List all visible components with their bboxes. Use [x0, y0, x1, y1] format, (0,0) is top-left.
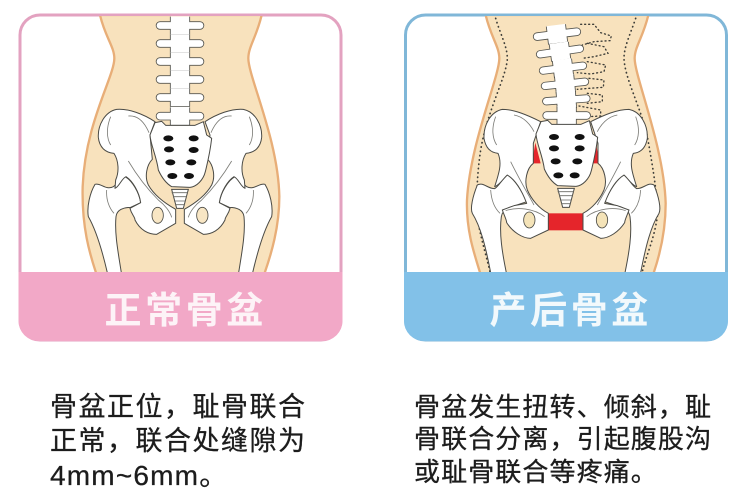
- red highlight: pubic symphysis gap: [547, 213, 585, 230]
- right hip and femur: [184, 109, 272, 273]
- panel: postpartum pelvis: [404, 15, 728, 341]
- red highlight: sacroiliac joint gaps: [532, 143, 599, 163]
- body silhouette: [467, 15, 666, 277]
- text block: normal pelvis description: 4mm~6mm。: [50, 460, 228, 491]
- text block: normal pelvis description: 正常，联合处缝隙为: [50, 426, 306, 456]
- text block: postpartum pelvis description: 骨盆发生扭转、倾斜，耻: [414, 392, 712, 422]
- text block: normal pelvis description: 骨盆正位，耻骨联合: [50, 392, 306, 422]
- text block: postpartum pelvis description: 骨联合分离，引起腹股沟: [414, 424, 712, 454]
- spine: [156, 16, 204, 126]
- text block: normal pelvis description: [50, 392, 306, 491]
- sacrum: [150, 121, 212, 208]
- panel frame: normal pelvis: [20, 15, 341, 340]
- spine, tilted: [532, 22, 591, 125]
- illustration: normal pelvis: [83, 15, 279, 277]
- heading: normal pelvis: 正常骨盆: [104, 290, 267, 331]
- panel: normal pelvis: [18, 15, 342, 341]
- left hip and femur: [88, 109, 176, 273]
- left hip and femur: [471, 109, 548, 273]
- heading: postpartum pelvis: 产后骨盆: [490, 290, 652, 331]
- text block: postpartum pelvis description: 或耻骨联合等疼痛。: [414, 457, 658, 487]
- sacrum: [536, 120, 598, 207]
- label band: normal pelvis: [18, 272, 342, 341]
- body silhouette: [83, 15, 279, 277]
- text block: postpartum pelvis description: [414, 392, 712, 487]
- dotted outline of the previous spine: [577, 24, 611, 117]
- label band: postpartum pelvis: [404, 272, 728, 341]
- illustration: postpartum pelvis: [467, 15, 666, 277]
- panel frame: postpartum pelvis: [406, 15, 726, 340]
- dotted outline of the previous body shape: [477, 18, 657, 272]
- right hip and femur: [583, 109, 660, 273]
